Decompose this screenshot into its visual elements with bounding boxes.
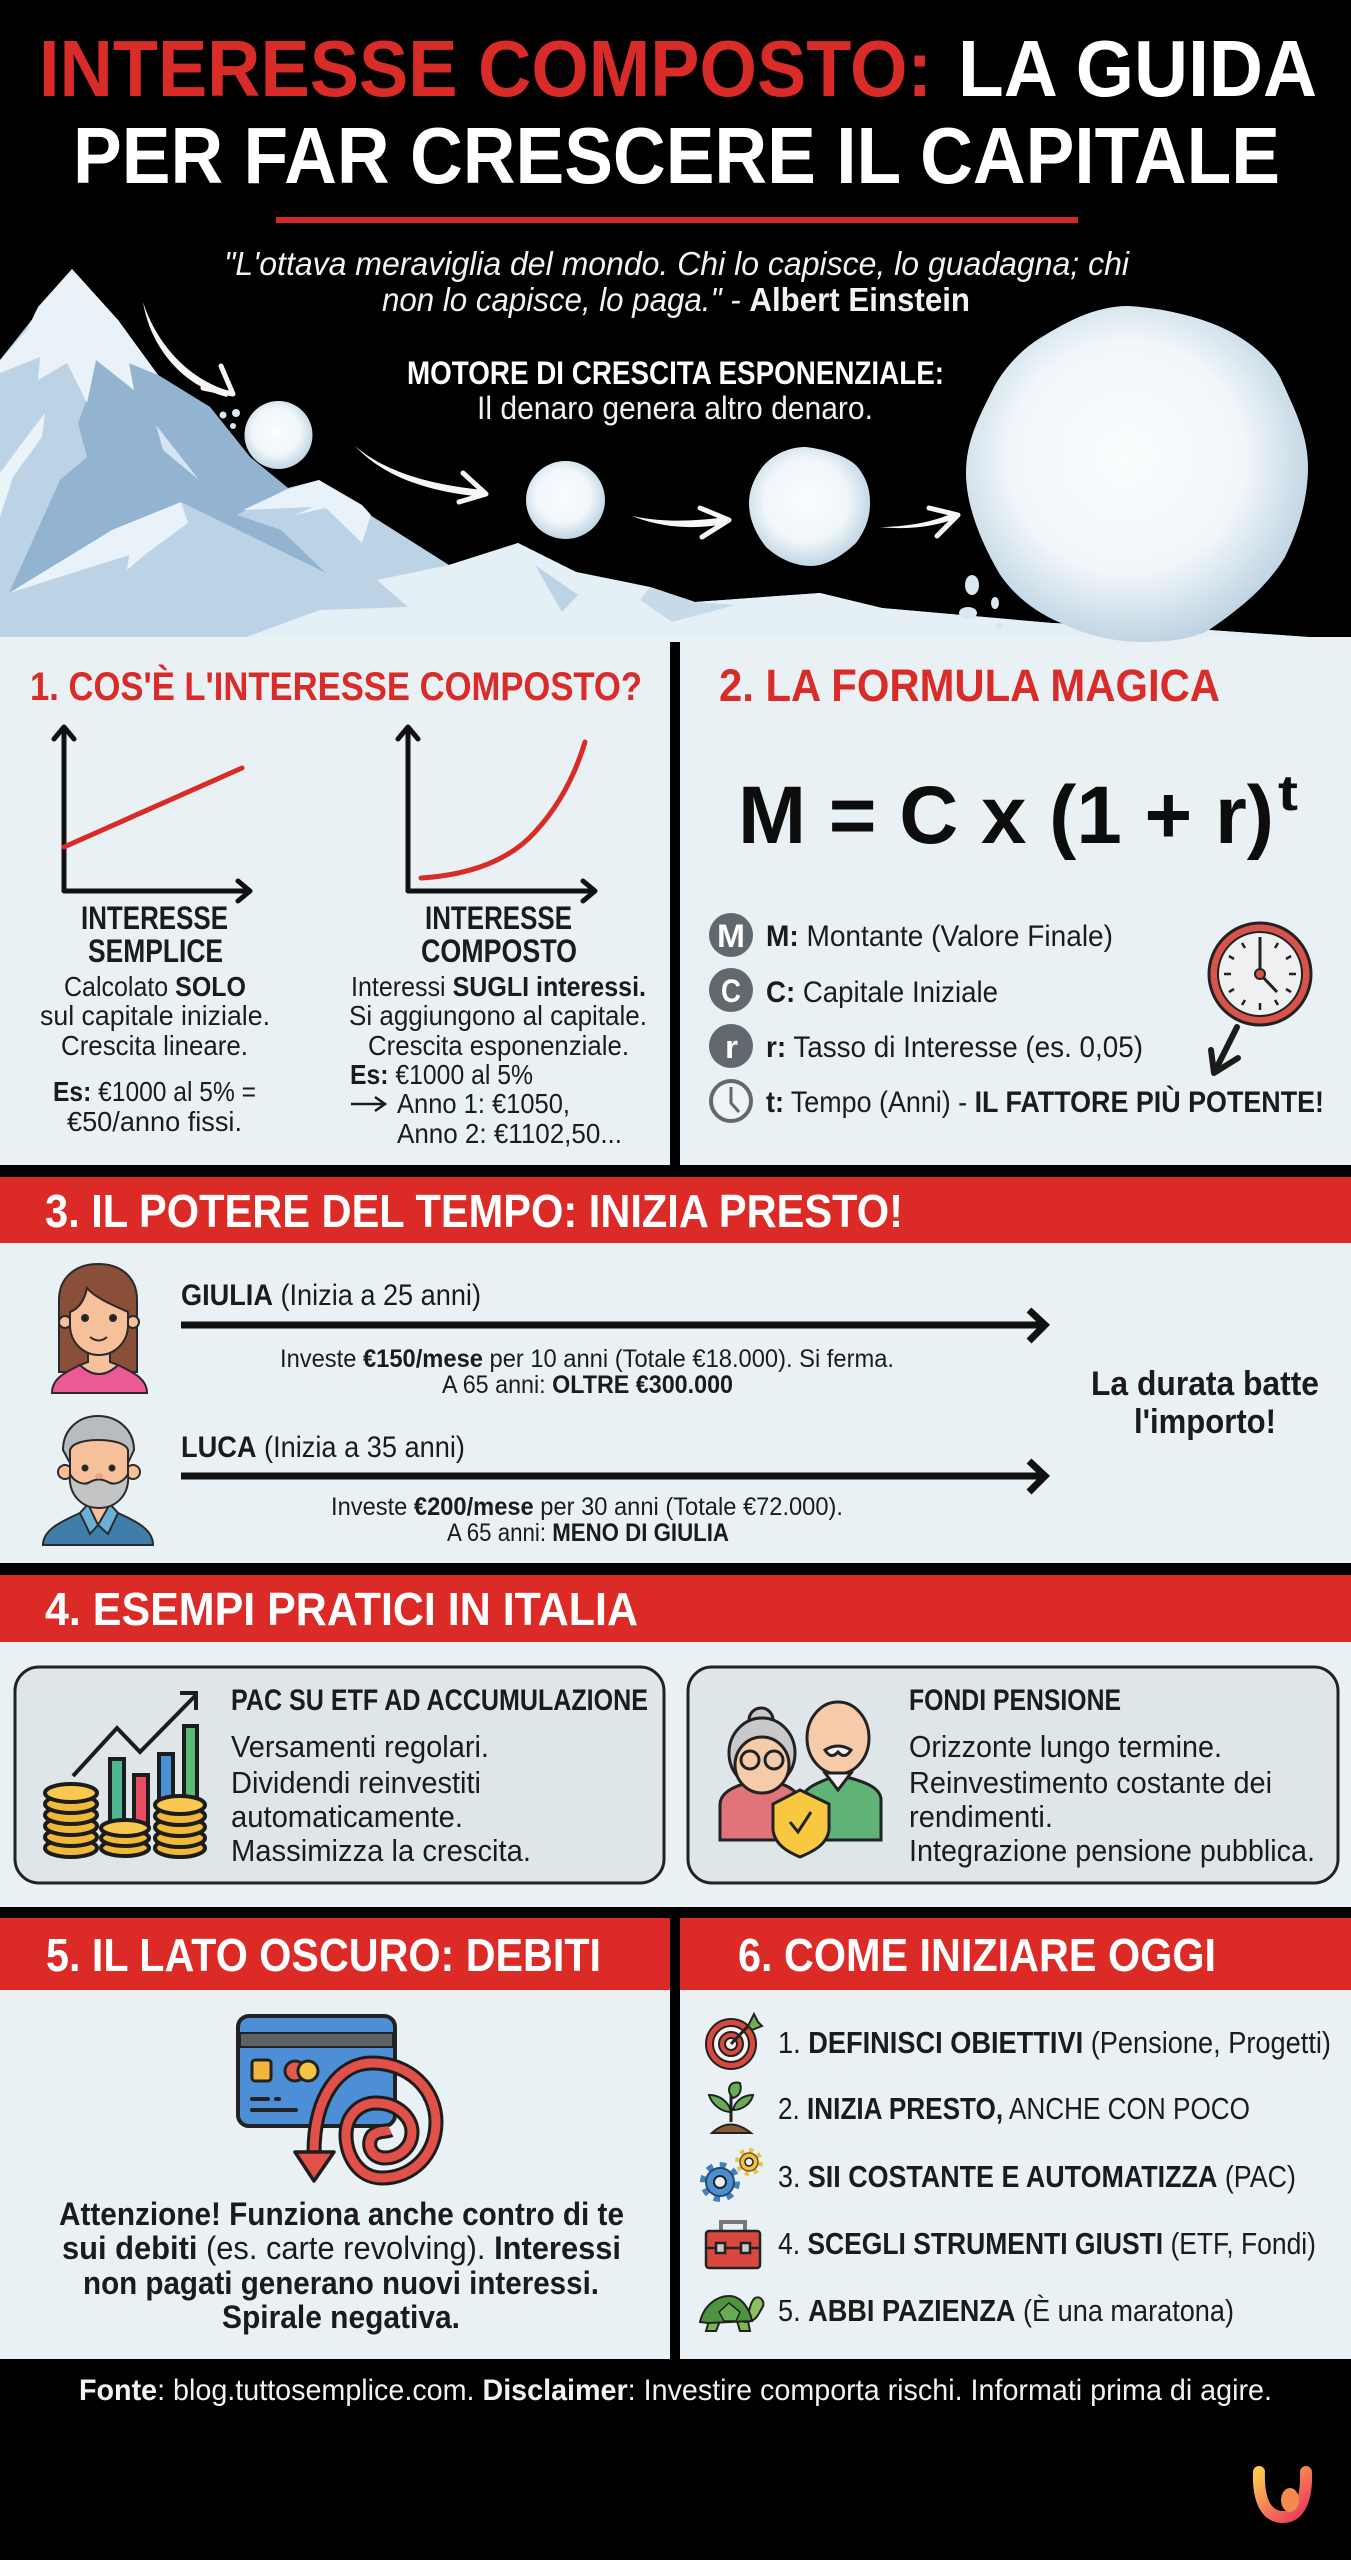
card text: Reinvestimento costante dei <box>909 1765 1272 1800</box>
legend: t: t: Tempo (Anni) - IL FATTORE PIÙ POTENTE! <box>766 1085 1324 1119</box>
card text: Dividendi reinvestiti <box>231 1765 481 1800</box>
card text: Integrazione pensione pubblica. <box>909 1833 1315 1868</box>
icon: turtle <box>700 2296 763 2331</box>
legend: r: r: Tasso di Interesse (es. 0,05) <box>766 1031 1143 1064</box>
quote: non lo capisce, lo paga." - Albert Einstein <box>382 281 970 318</box>
chart: simple interest <box>54 727 250 901</box>
card text <box>909 1684 1315 1868</box>
text: compound interest: INTERESSE <box>425 900 572 936</box>
title: LA GUIDA <box>958 24 1317 113</box>
illustration: mountain and growing snowballs <box>0 269 1351 642</box>
footer source and disclaimer: Fonte: blog.tuttosemplice.com. Disclaimer: Investire comporta rischi. Informati prima di agire. <box>79 2374 1272 2407</box>
card text: rendimenti. <box>909 1799 1053 1834</box>
snowball medium <box>526 461 605 539</box>
card text: Versamenti regolari. <box>231 1729 489 1764</box>
Luca timeline: A 65 anni: MENO DI GIULIA <box>447 1519 729 1547</box>
quote: "L'ottava meraviglia del mondo. Chi lo capisce, lo guadagna; chi <box>224 245 1131 282</box>
formula: M = C x (1 + r) <box>738 770 1274 861</box>
icon: target <box>706 2014 762 2069</box>
text: simple interest: €50/anno fissi. <box>67 1106 242 1137</box>
arrow 1 <box>143 302 233 397</box>
legend: C <box>709 968 998 1012</box>
snow crumbs <box>220 409 1003 630</box>
step 3: 3. SII COSTANTE E AUTOMATIZZA (PAC) <box>778 2159 1296 2194</box>
text: simple interest: SEMPLICE <box>88 933 223 969</box>
icon: clock with arrow <box>1209 923 1311 1073</box>
title <box>39 24 1317 200</box>
snowball giant <box>966 306 1308 642</box>
step 5: 5. ABBI PAZIENZA (È una maratona) <box>778 2293 1234 2328</box>
text: simple interest: Es: €1000 al 5% = <box>53 1076 256 1107</box>
icon: sprout <box>709 2082 753 2133</box>
text: compound interest: COMPOSTO <box>421 933 577 969</box>
legend: M <box>709 913 1113 957</box>
icon: gears <box>704 2151 760 2198</box>
text: simple interest: Calcolato SOLO <box>64 971 246 1002</box>
snowball large <box>749 447 870 566</box>
icon: credit card and debt spiral <box>238 2016 436 2181</box>
text: compound interest: Crescita esponenziale. <box>368 1030 629 1061</box>
callout: duration beats amount: l'importo! <box>1134 1403 1276 1441</box>
legend: C: C <box>721 973 741 1009</box>
formula: t <box>1278 765 1298 821</box>
legend: r <box>709 1024 1143 1068</box>
subheading: growth engine: Il denaro genera altro denaro. <box>477 390 873 426</box>
mountains <box>0 269 1351 642</box>
step 1 <box>706 2014 1331 2069</box>
legend: M: M <box>717 918 745 954</box>
card: PAC on ETF <box>15 1667 664 1883</box>
panel: 1 what is compound interest <box>0 642 670 1165</box>
Luca timeline <box>181 1431 1045 1547</box>
panel: 6 how to start today <box>680 1918 1351 2359</box>
text: compound interest: Interessi SUGLI interessi. <box>351 971 646 1002</box>
arrow 4 <box>880 508 958 536</box>
step 4 <box>706 2222 1316 2268</box>
warning text: Spirale negativa. <box>222 2299 460 2335</box>
text: simple interest <box>40 900 270 1137</box>
card text: PAC SU ETF AD ACCUMULAZIONE <box>231 1684 648 1717</box>
arrow 3 <box>632 508 729 537</box>
icon: coins and growth chart <box>45 1693 205 1857</box>
step 2: 2. INIZIA PRESTO, ANCHE CON POCO <box>778 2091 1250 2126</box>
warning text <box>59 2196 624 2335</box>
subheading: growth engine: MOTORE DI CRESCITA ESPONENZIALE: <box>407 355 944 391</box>
text: compound interest: Anno 2: €1102,50... <box>397 1118 622 1149</box>
icon: logo <box>1259 2472 1306 2517</box>
step 3 <box>704 2151 1296 2198</box>
card text: automaticamente. <box>231 1799 463 1834</box>
heading band 4: 4. ESEMPI PRATICI IN ITALIA <box>45 1583 638 1635</box>
card text: FONDI PENSIONE <box>909 1684 1121 1717</box>
text: compound interest: Anno 1: €1050, <box>397 1088 570 1119</box>
warning text: non pagati generano nuovi interessi. <box>83 2265 599 2301</box>
quote <box>224 245 1131 318</box>
text: compound interest: Es: €1000 al 5% <box>350 1059 533 1090</box>
chart: compound interest <box>398 727 595 901</box>
Giulia timeline: GIULIA (Inizia a 25 anni) <box>181 1279 481 1312</box>
warning text: Attenzione! Funziona anche contro di te <box>59 2196 624 2232</box>
heading band 4 <box>0 1575 1351 1642</box>
text: compound interest <box>349 900 647 1149</box>
title: INTERESSE COMPOSTO: <box>39 24 932 113</box>
text: simple interest: sul capitale iniziale. <box>40 1000 270 1031</box>
panel: 2 magic formula <box>680 642 1351 1165</box>
panel: 5 dark side debts <box>0 1918 670 2359</box>
heading 2: 2. LA FORMULA MAGICA <box>719 660 1220 711</box>
card: pension funds <box>688 1667 1338 1883</box>
heading 1: 1. COS'È L'INTERESSE COMPOSTO? <box>30 664 642 709</box>
icon: toolbox <box>706 2222 760 2268</box>
heading band 3 <box>0 1177 1351 1243</box>
text: compound interest: Si aggiungono al capitale. <box>349 1000 647 1031</box>
Luca timeline: Investe €200/mese per 30 anni (Totale €72.000). <box>331 1493 843 1521</box>
avatar: Giulia <box>52 1264 147 1393</box>
legend: C: C: Capitale Iniziale <box>766 976 998 1009</box>
Giulia timeline: Investe €150/mese per 10 anni (Totale €18.000). Si ferma. <box>280 1345 894 1373</box>
card text: Orizzonte lungo termine. <box>909 1729 1222 1764</box>
heading band 6 <box>680 1918 1351 1990</box>
callout: duration beats amount: La durata batte <box>1091 1365 1319 1403</box>
warning text: sui debiti (es. carte revolving). Interessi <box>62 2230 621 2266</box>
heading band 6: 6. COME INIZIARE OGGI <box>738 1929 1216 1981</box>
step 1: 1. DEFINISCI OBIETTIVI (Pensione, Progetti) <box>778 2025 1331 2060</box>
snowball small <box>244 401 312 469</box>
card text: Massimizza la crescita. <box>231 1833 531 1868</box>
legend: r: r <box>725 1029 738 1065</box>
card text <box>231 1684 648 1868</box>
heading band 3: 3. IL POTERE DEL TEMPO: INIZIA PRESTO! <box>45 1185 903 1237</box>
legend: M: M: Montante (Valore Finale) <box>766 920 1113 953</box>
text: simple interest: Crescita lineare. <box>61 1030 248 1061</box>
heading band 5 <box>0 1918 670 1990</box>
Giulia timeline: A 65 anni: OLTRE €300.000 <box>442 1371 733 1399</box>
arrow 2 <box>355 446 486 502</box>
icon: elderly couple and shield <box>720 1702 881 1857</box>
text: simple interest: INTERESSE <box>81 900 228 936</box>
heading band 5: 5. IL LATO OSCURO: DEBITI <box>46 1929 601 1981</box>
Luca timeline: LUCA (Inizia a 35 anni) <box>181 1431 465 1464</box>
callout: duration beats amount <box>1091 1365 1319 1441</box>
avatar: Luca <box>43 1416 153 1545</box>
step 2 <box>709 2082 1250 2133</box>
subheading: growth engine <box>407 355 944 426</box>
panel: 4 practical examples <box>0 1575 1351 1907</box>
Giulia timeline <box>181 1279 1045 1399</box>
panel: 3 power of time <box>0 1177 1351 1563</box>
step 4: 4. SCEGLI STRUMENTI GIUSTI (ETF, Fondi) <box>778 2226 1316 2261</box>
